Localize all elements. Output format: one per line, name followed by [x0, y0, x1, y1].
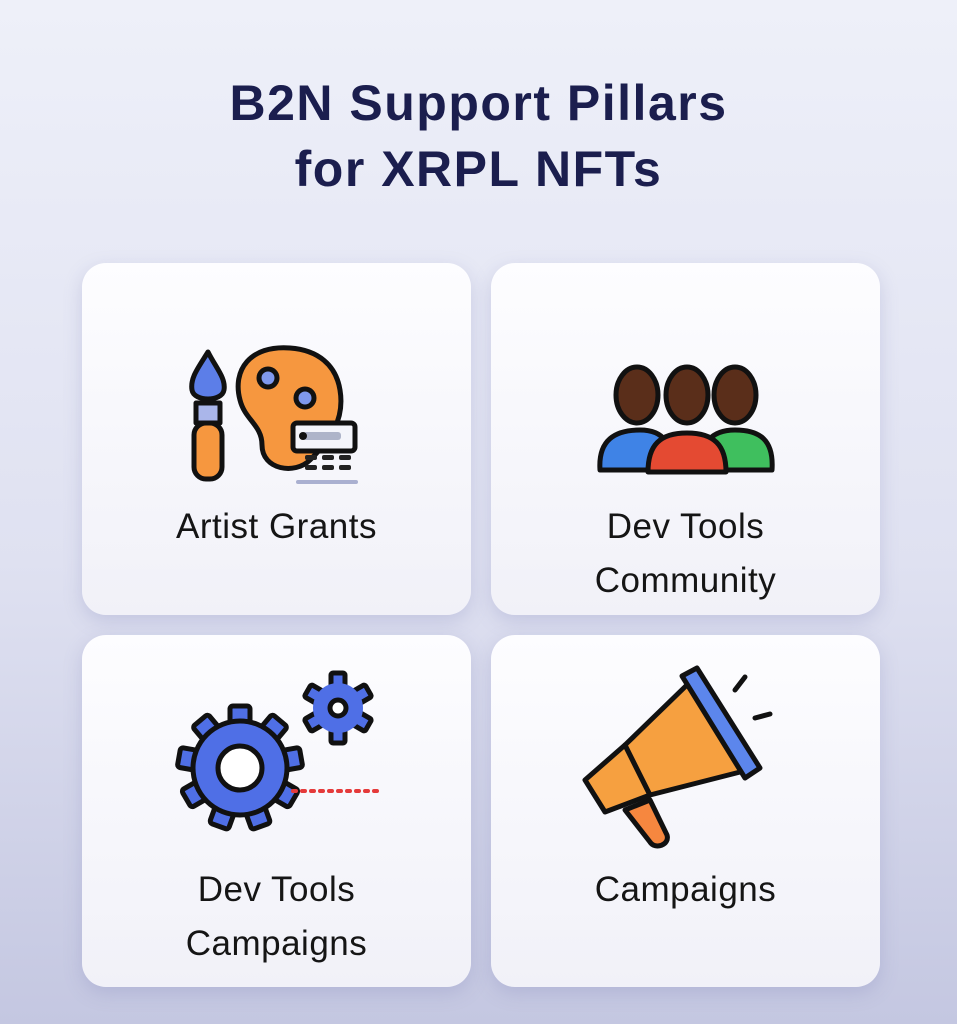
- title: B2N Support Pillars: [229, 75, 728, 131]
- label: [595, 507, 776, 600]
- label: Campaigns: [186, 924, 367, 963]
- label: [186, 870, 367, 963]
- label: Dev Tools: [607, 507, 764, 546]
- panel: dev tools campaigns: [82, 635, 471, 987]
- label: Community: [595, 561, 776, 600]
- label: Dev Tools: [198, 870, 355, 909]
- title: for XRPL NFTs: [295, 141, 662, 197]
- icon: gears: [175, 670, 379, 832]
- panel: campaigns: [491, 635, 880, 987]
- icon: megaphone: [582, 665, 772, 848]
- title: [229, 75, 728, 197]
- panel: artist grants: [82, 263, 471, 615]
- icon: people: [597, 364, 775, 474]
- panel: dev tools community: [491, 263, 880, 615]
- label: Campaigns: [595, 870, 776, 909]
- icon: brush and palette: [189, 345, 358, 484]
- label: Artist Grants: [176, 507, 377, 546]
